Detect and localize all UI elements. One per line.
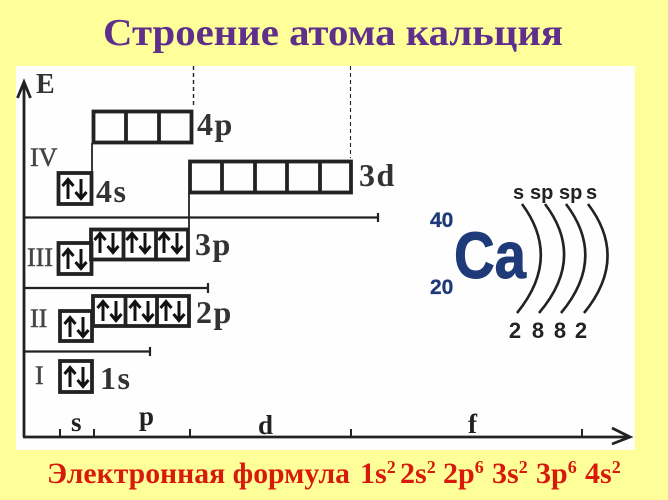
shell subshell labels	[513, 182, 597, 204]
electron formula: Электронная формула	[47, 457, 350, 490]
energy level diagram	[18, 66, 630, 444]
electron formula: 2	[387, 457, 396, 477]
period labels: I	[35, 361, 44, 390]
electron formula: 3s	[492, 457, 519, 490]
period labels: IV	[30, 143, 58, 172]
panel: diagram background	[16, 66, 635, 450]
period labels: II	[30, 304, 47, 333]
orbital 3d	[190, 157, 396, 193]
orbital 2s	[60, 311, 92, 341]
orbital 4p: 4p	[197, 106, 234, 142]
shell subshell labels: sp	[559, 182, 582, 204]
electron counts	[509, 318, 587, 343]
electron formula: 6	[475, 457, 484, 477]
electron counts: 2	[509, 318, 521, 343]
orbital 3p	[91, 226, 232, 262]
orbital 2p	[93, 294, 233, 330]
orbital 1s	[60, 360, 131, 396]
title: Строение атома кальция	[103, 12, 563, 54]
orbital 1s: 1s	[100, 360, 131, 396]
electron counts: 2	[575, 318, 587, 343]
atomic number: 20	[430, 276, 453, 299]
shell subshell labels: s	[586, 182, 597, 204]
shell subshell labels: sp	[530, 182, 553, 204]
period labels: III	[27, 243, 53, 272]
orbital 3p: 3p	[195, 226, 232, 262]
electron formula: 2s	[400, 457, 427, 490]
element symbol: Ca	[454, 218, 527, 292]
orbital 4p	[94, 106, 234, 143]
electron counts: 8	[532, 318, 544, 343]
subshell axis	[23, 428, 630, 444]
mass number: 40	[430, 209, 453, 232]
electron formula: 1s	[360, 457, 387, 490]
electron formula: 2	[519, 457, 528, 477]
electron formula: 2	[612, 457, 621, 477]
orbital 3s	[58, 243, 92, 274]
subshell labels: p	[139, 401, 154, 431]
electron formula: 4s	[585, 457, 612, 490]
orbital 2p: 2p	[196, 294, 233, 330]
subshell labels: s	[71, 407, 82, 437]
subshell labels: f	[468, 409, 478, 439]
orbital 4s: 4s	[96, 173, 127, 209]
connectors	[92, 143, 189, 228]
calcium atom	[430, 182, 608, 343]
shell subshell labels: s	[513, 182, 524, 204]
electron formula: 2p	[443, 457, 475, 490]
orbital 4s	[58, 173, 127, 209]
electron formula: 3p	[536, 457, 568, 490]
electron counts: 8	[554, 318, 566, 343]
level divider lines	[25, 213, 378, 356]
subshell labels	[71, 401, 478, 440]
electron formula: 2	[427, 457, 436, 477]
orbital 3d: 3d	[359, 157, 396, 193]
electron shells	[517, 204, 608, 313]
dashed guide lines	[194, 66, 350, 158]
subshell labels: d	[258, 410, 273, 440]
energy axis	[18, 82, 30, 437]
axis label E: E	[36, 69, 55, 100]
electron formula: 6	[568, 457, 577, 477]
period labels	[27, 143, 58, 390]
